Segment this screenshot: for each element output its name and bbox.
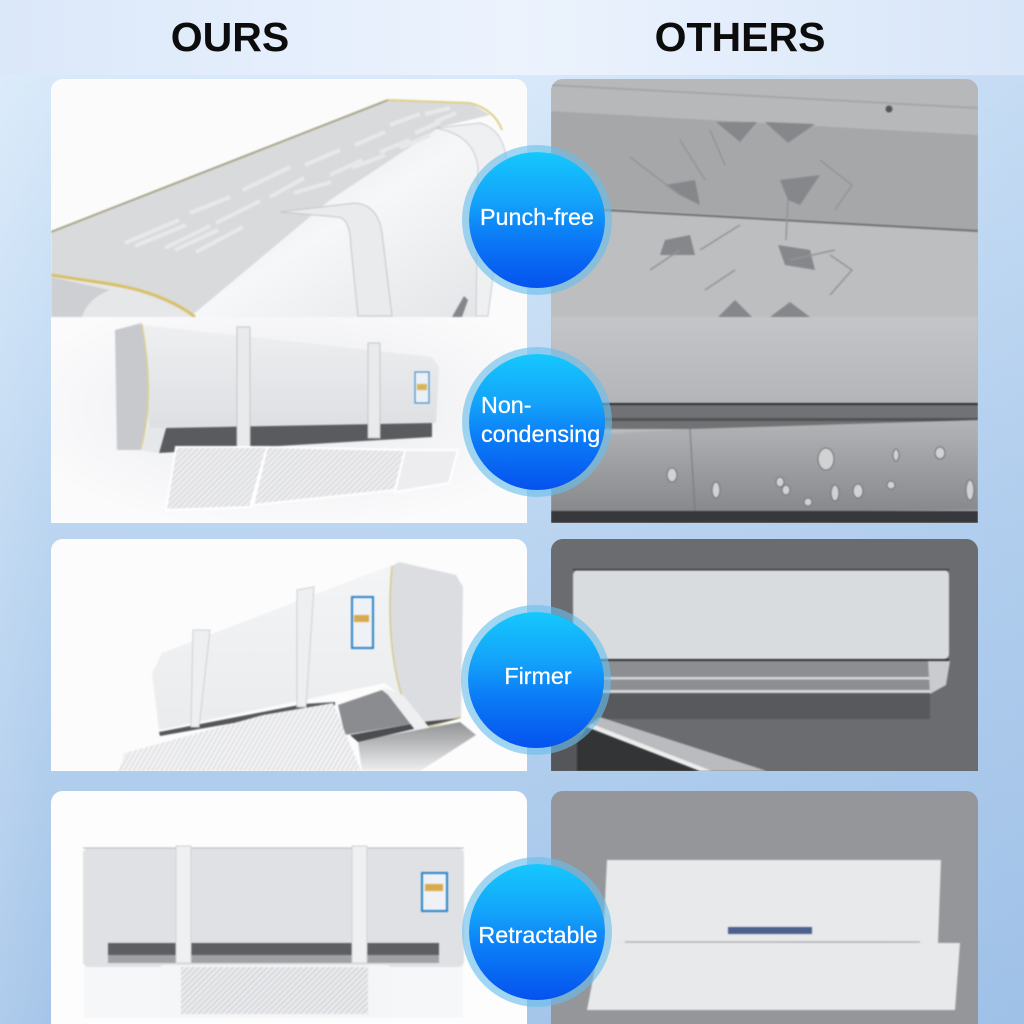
closeup front bbox=[190, 127, 490, 317]
grille slots bbox=[125, 108, 456, 252]
badge: punch-free bbox=[469, 152, 605, 288]
panel: others punch-free and non-condensing bbox=[551, 79, 978, 523]
badge: retractable bbox=[469, 864, 605, 1000]
wind deflector bbox=[118, 703, 361, 771]
panel: others retractable bbox=[551, 791, 978, 1024]
badge: non-condensing: Non- bbox=[481, 392, 532, 418]
badge: punch-free: Punch-free bbox=[480, 204, 594, 230]
badge: non-condensing: condensing bbox=[481, 421, 600, 447]
straps bbox=[191, 630, 210, 727]
badge: non-condensing bbox=[469, 354, 605, 490]
unit body bbox=[152, 565, 402, 730]
straps bbox=[176, 846, 191, 963]
badge: firmer bbox=[468, 612, 604, 748]
panel: others firmer bbox=[551, 539, 978, 771]
badge: retractable: Retractable bbox=[478, 922, 598, 948]
heading: ours: OURS bbox=[171, 14, 289, 60]
energy label bbox=[422, 873, 447, 911]
badge: firmer: Firmer bbox=[504, 662, 572, 688]
panel: ours firmer bbox=[51, 539, 527, 771]
energy label bbox=[352, 597, 373, 648]
closeup strap bbox=[280, 203, 392, 316]
panel: ours retractable bbox=[51, 791, 527, 1024]
closeup top face bbox=[51, 100, 490, 317]
wind deflector bbox=[159, 965, 392, 1018]
heading: others: OTHERS bbox=[655, 14, 825, 60]
panel: ours punch-free and non-condensing bbox=[51, 79, 527, 523]
water droplets bbox=[667, 447, 974, 506]
cracks and holes bbox=[660, 122, 820, 317]
wall unit bbox=[115, 323, 439, 453]
wall unit wind deflector bbox=[166, 447, 458, 510]
